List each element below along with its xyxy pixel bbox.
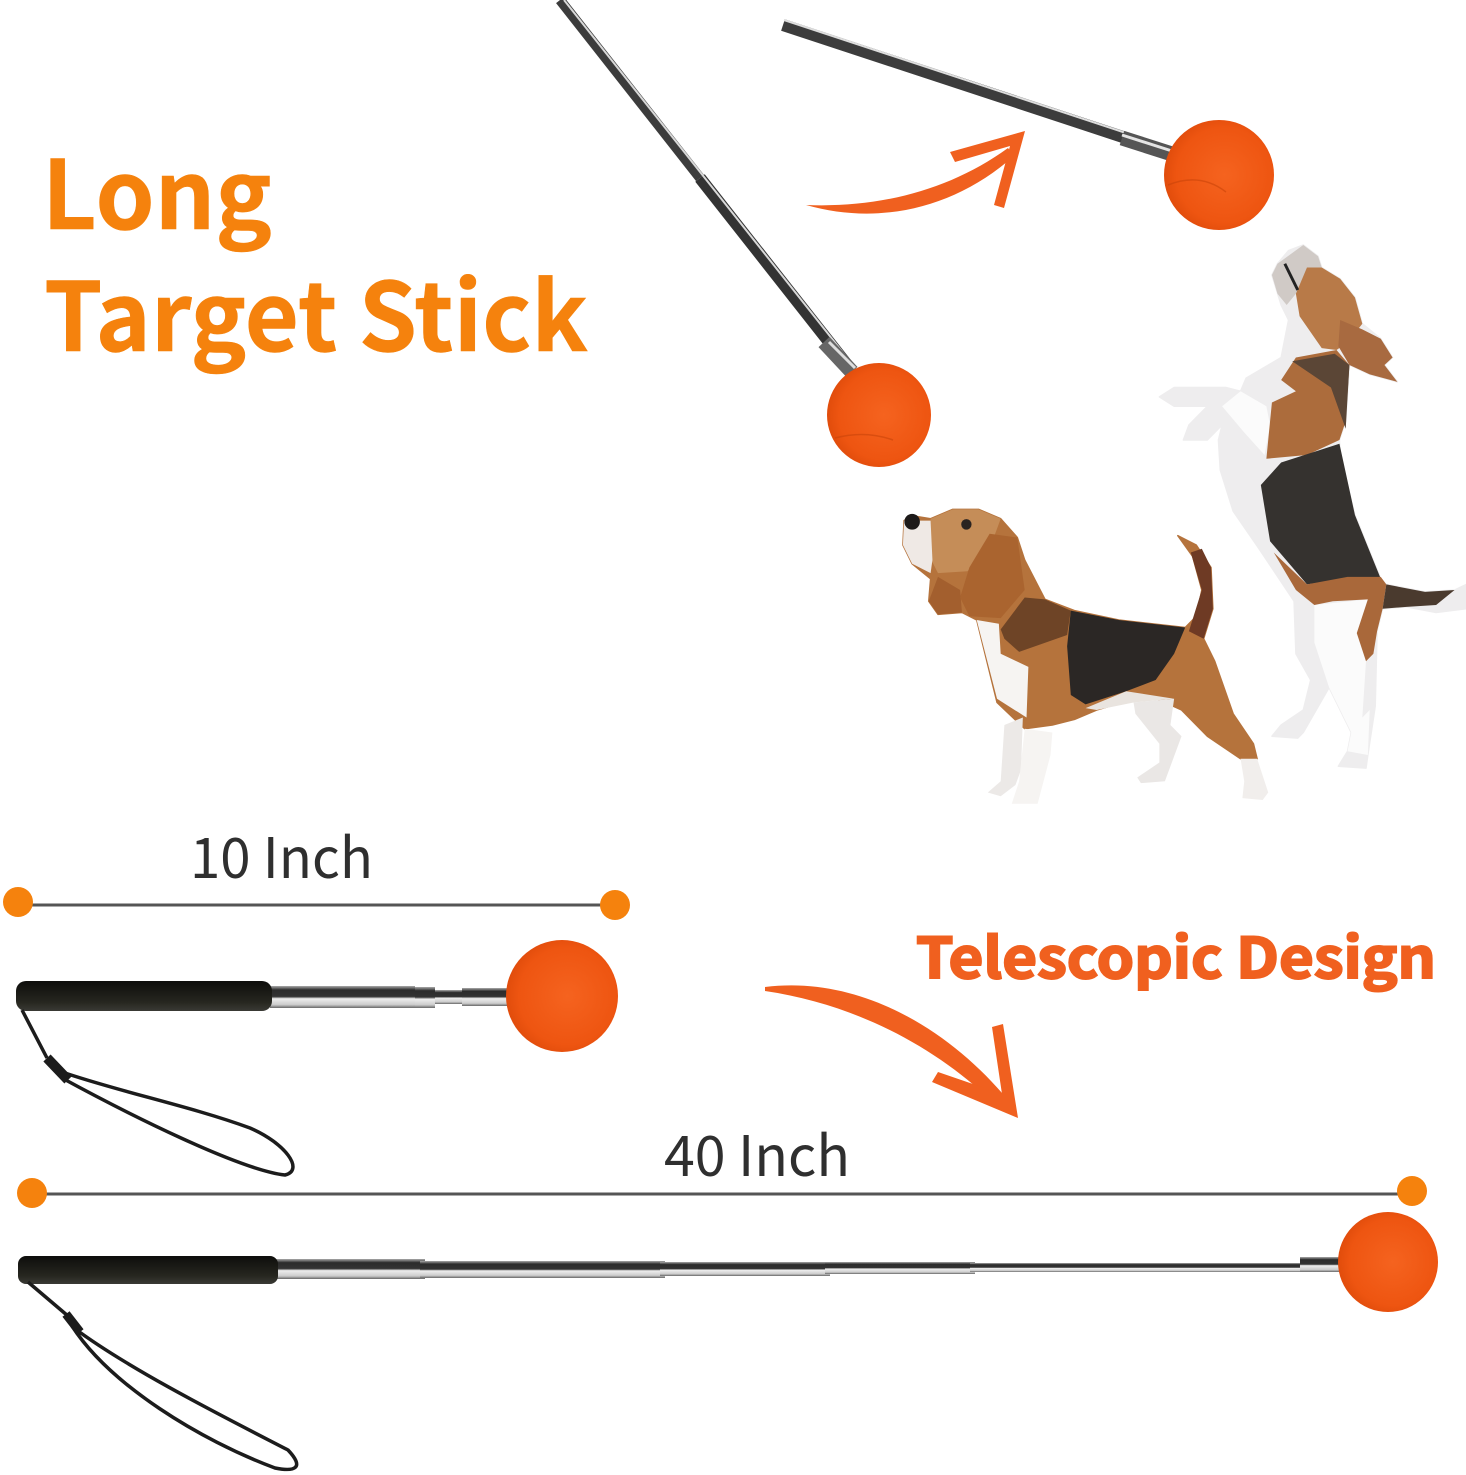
title: Long Target Stick: Long (42, 120, 272, 257)
title: Long Target Stick: Target Stick (44, 242, 588, 379)
extended target stick (18, 1212, 1438, 1469)
illustration: standing beagle (903, 509, 1268, 804)
diagonal target stick with ball (560, 0, 931, 467)
arrow: curved up right (806, 131, 1025, 214)
angled target stick with ball (783, 20, 1274, 230)
dimension line: 10 inch (3, 887, 630, 920)
collapsed target stick (16, 940, 618, 1175)
heading: Telescopic Design: Telescopic Design (916, 914, 1436, 995)
title: Long Target Stick (42, 120, 588, 379)
label: 40 Inch: 40 Inch (664, 1112, 850, 1193)
label: 10 Inch: 10 Inch (190, 814, 373, 895)
arrow: curved down right (765, 985, 1018, 1118)
illustration: jumping beagle (1159, 245, 1466, 768)
dimension line: 40 inch (17, 1176, 1427, 1208)
